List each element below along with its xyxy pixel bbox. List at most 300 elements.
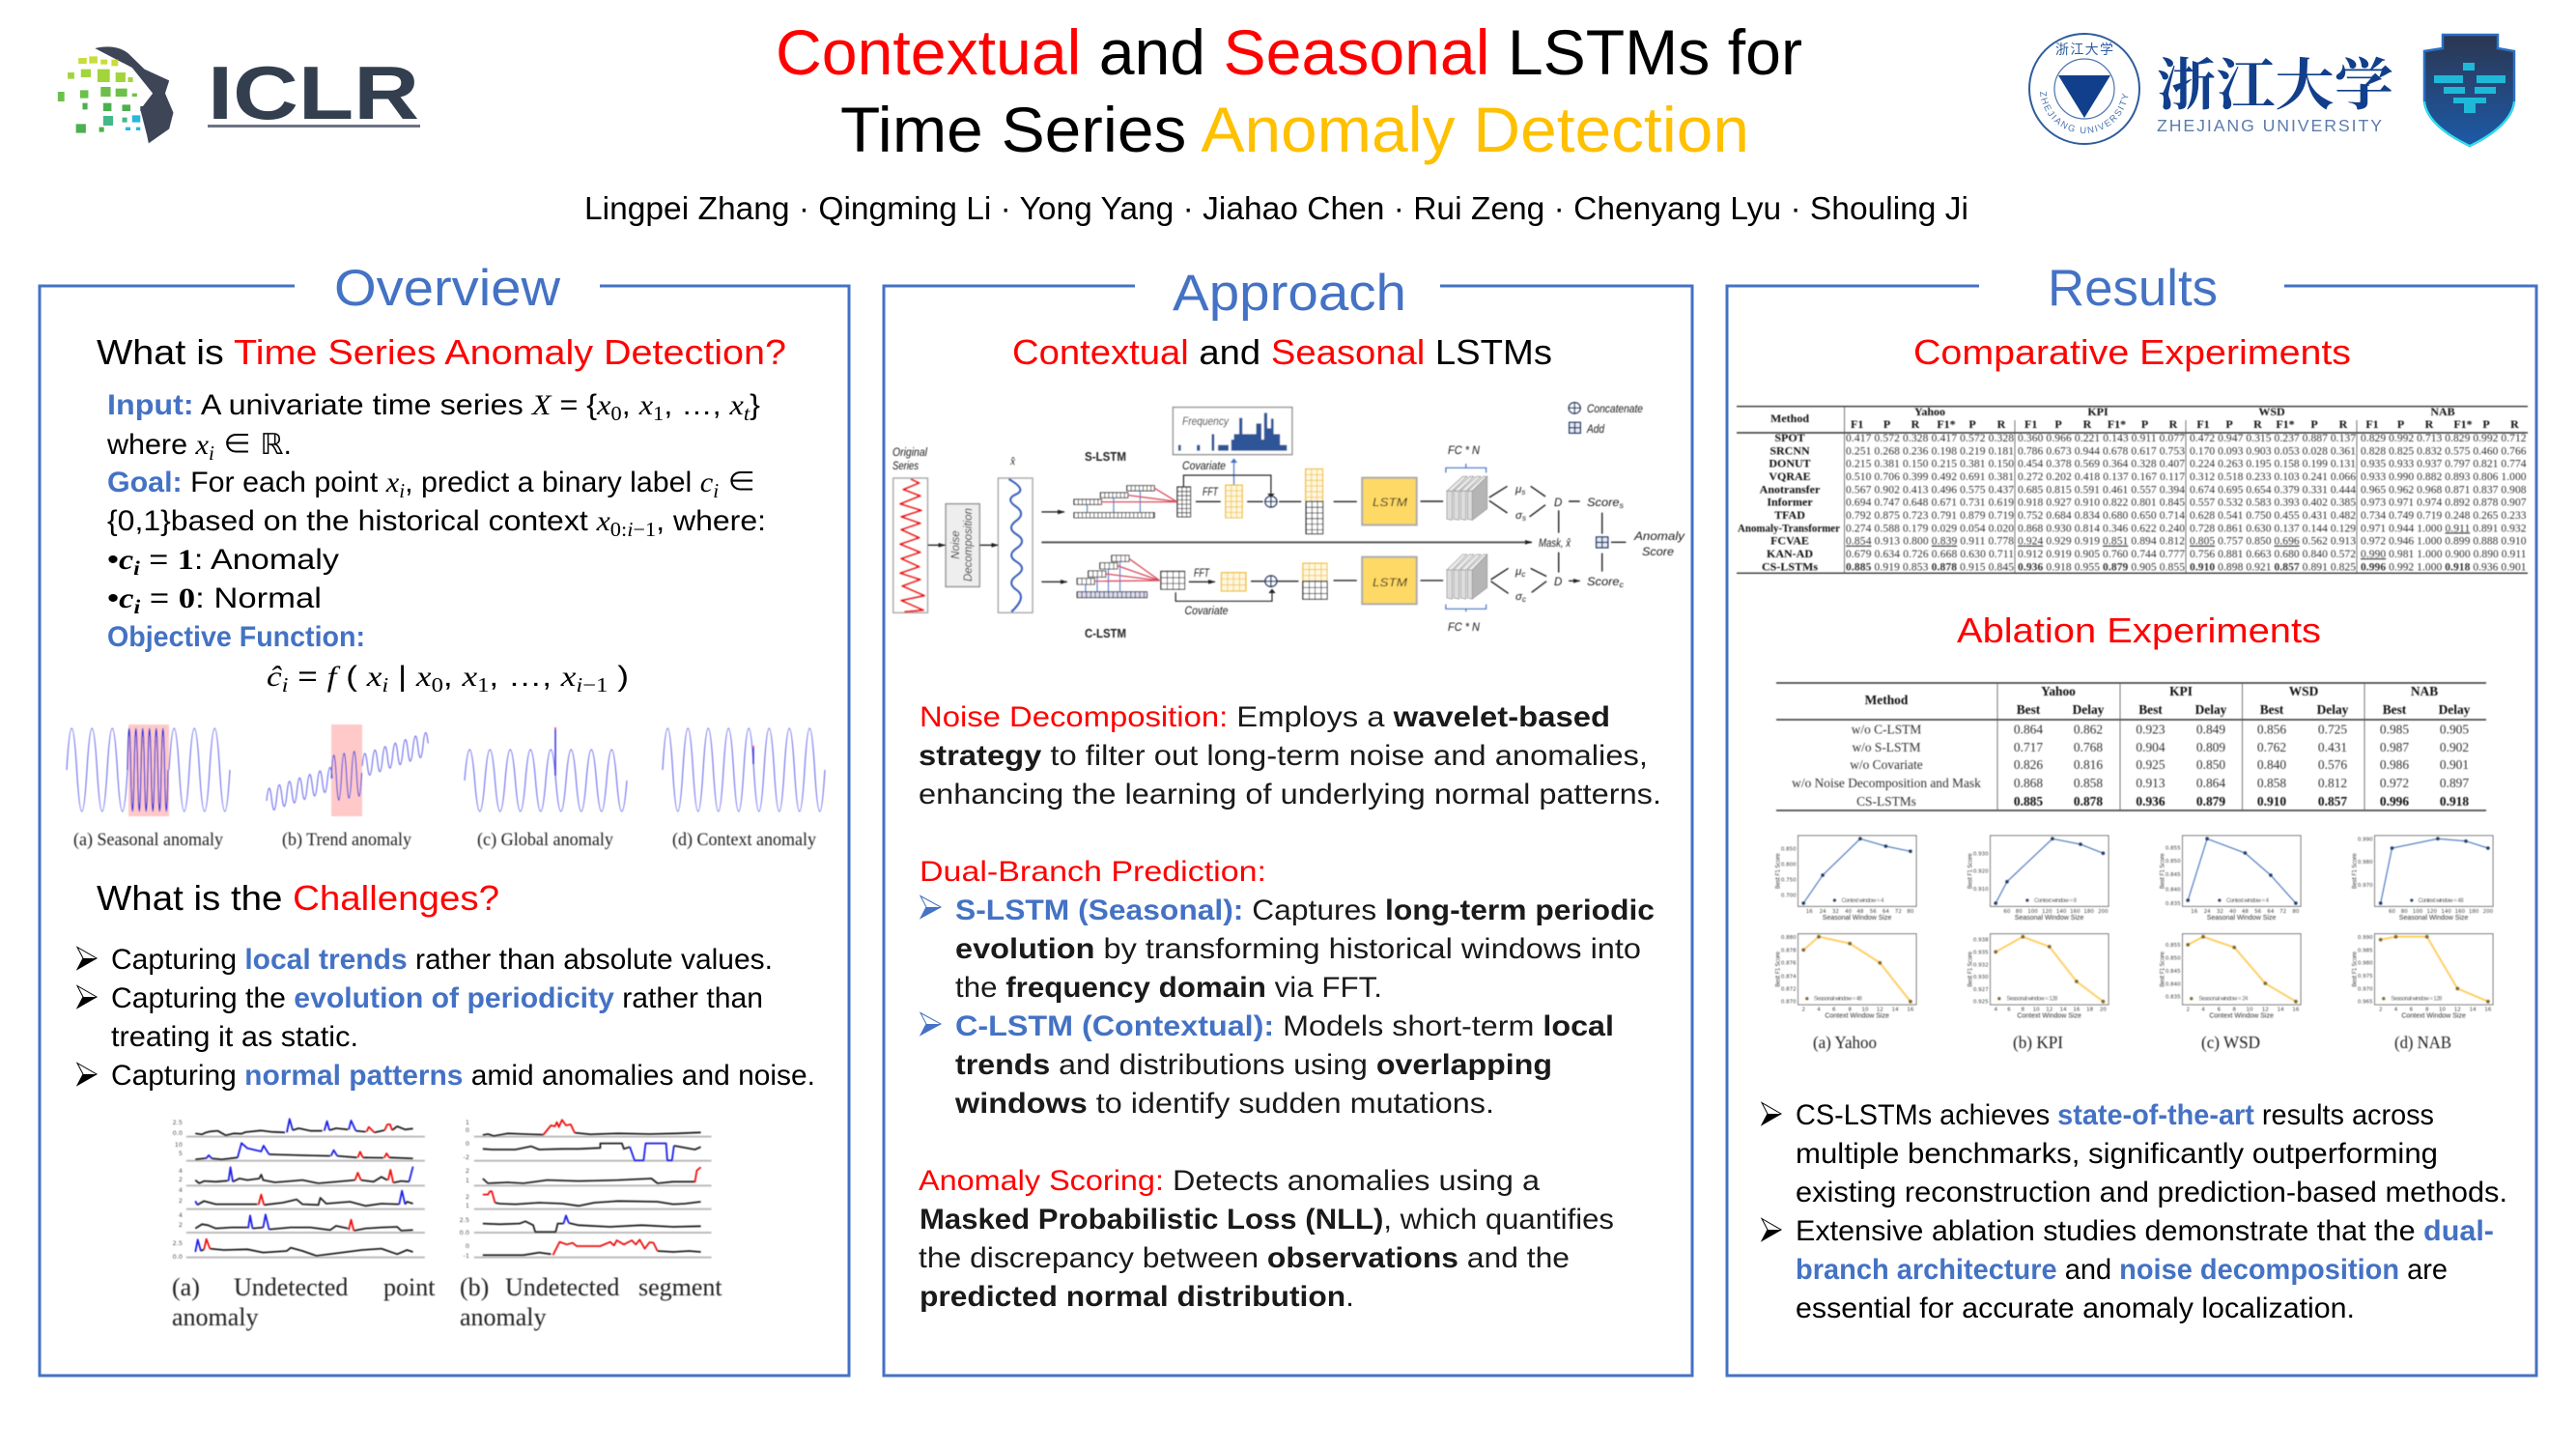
text block: problem definition: c bbox=[700, 467, 713, 498]
table: ablation results: Best bbox=[2138, 702, 2163, 717]
chart: Yahoo context window: 0.878 bbox=[1781, 948, 1797, 953]
text block: problem definition: i bbox=[209, 441, 214, 465]
chart: NAB seasonal window: 140 bbox=[2441, 909, 2451, 915]
table: comparative results: P bbox=[2054, 417, 2062, 431]
text block: problem definition: x bbox=[728, 389, 745, 421]
text block: problem definition: •c bbox=[107, 544, 131, 576]
table: comparative results: 0.472 0.947 0.315 0.237 0.887 0.137 bbox=[2190, 433, 2356, 444]
chart: WSD context window: 0.835 bbox=[2166, 995, 2181, 1001]
table: ablation results: Method bbox=[1865, 693, 1909, 707]
chart: NAB seasonal window: Context window = 48 bbox=[2419, 898, 2464, 904]
table: comparative results: DONUT bbox=[1769, 457, 1811, 470]
text block: problem definition: ∈ ℝ. bbox=[214, 429, 292, 461]
chart: Yahoo context window: 12 bbox=[1877, 1008, 1883, 1013]
architecture labels: Add bbox=[1586, 424, 1605, 436]
chart: undetected segment anomaly bbox=[460, 1119, 722, 1331]
chart: Yahoo context window: Seasonal window = 48 bbox=[1814, 997, 1863, 1003]
chart: WSD seasonal window: 48 bbox=[2242, 909, 2249, 915]
chart: WSD seasonal window: 40 bbox=[2229, 909, 2237, 915]
chart: WSD seasonal window: Context window = 4 bbox=[2226, 898, 2270, 904]
chart: KPI seasonal window: 160 bbox=[2070, 909, 2081, 915]
table: comparative results: P bbox=[2482, 417, 2490, 431]
chart: WSD seasonal window: 32 bbox=[2217, 909, 2223, 915]
table: ablation results: 0.431 bbox=[2318, 740, 2347, 754]
table: comparative results: 0.792 0.875 0.723 0.791 0.879 0.719 bbox=[1846, 510, 2014, 522]
text block: problem definition: 0 bbox=[432, 673, 443, 696]
chart: KPI context window: 6 bbox=[2007, 1008, 2011, 1013]
captions: datasets: (b) KPI bbox=[2013, 1033, 2063, 1053]
table: comparative results: F1 bbox=[2196, 417, 2210, 431]
chart: anomaly types bbox=[67, 724, 825, 850]
chart: NAB seasonal window: Seasonal Window Size bbox=[2399, 915, 2469, 922]
table: comparative results: F1 bbox=[1851, 417, 1863, 431]
chart: Yahoo context window: 8 bbox=[1848, 1008, 1852, 1013]
text block: dual-branch prediction bbox=[920, 856, 1655, 1120]
chart: KPI seasonal window: Seasonal Window Size bbox=[2015, 915, 2084, 922]
architecture labels: S-LSTM bbox=[1085, 450, 1126, 464]
table: comparative results: R bbox=[2253, 417, 2262, 431]
architecture labels: s bbox=[1521, 488, 1525, 497]
architecture labels: D bbox=[1554, 577, 1562, 588]
table: ablation results: Delay bbox=[2195, 702, 2227, 717]
table: comparative results: 0.756 0.881 0.663 0.680 0.840 0.572 bbox=[2190, 549, 2356, 560]
chart: undetected point anomaly: anomaly bbox=[172, 1303, 259, 1331]
chart: KPI context window: 14 bbox=[2060, 1008, 2067, 1013]
chart: undetected point anomaly: 5 bbox=[179, 1150, 183, 1157]
table: ablation results: 0.996 bbox=[2380, 794, 2409, 809]
table: comparative results: 0.752 0.684 0.834 0.680 0.650 0.714 bbox=[2018, 510, 2185, 522]
chart: Yahoo context window: 0.876 bbox=[1781, 961, 1797, 967]
chart: Yahoo context window: 0.880 bbox=[1781, 935, 1797, 941]
architecture labels: μ bbox=[1515, 566, 1521, 578]
table: comparative results: 0.224 0.263 0.195 0.158 0.199 0.131 bbox=[2190, 459, 2356, 470]
architecture labels: Decomposition bbox=[963, 508, 975, 582]
table: comparative results: 0.936 0.918 0.955 0.879 0.905 0.855 bbox=[2018, 561, 2185, 573]
chart: undetected point anomaly: 2 bbox=[179, 1221, 183, 1229]
chart: NAB seasonal window: 0.990 bbox=[2358, 837, 2373, 842]
table: comparative results: 0.805 0.757 0.850 0.696 0.562 0.913 bbox=[2190, 536, 2356, 548]
table: ablation results: CS-LSTMs bbox=[1856, 794, 1916, 809]
logo: Zhejiang University bbox=[2028, 33, 2515, 147]
chart: Yahoo seasonal window: 80 bbox=[1907, 909, 1914, 915]
chart: WSD context window: 16 bbox=[2292, 1008, 2300, 1013]
text block: problem definition: 0 bbox=[610, 402, 622, 425]
chart: WSD seasonal window: 0.840 bbox=[2166, 888, 2181, 894]
chart: WSD context window: 0.840 bbox=[2166, 981, 2181, 987]
text block: problem definition: {0,1}based on the historical context x bbox=[107, 505, 609, 537]
architecture labels: Anomaly bbox=[1633, 531, 1685, 543]
architecture labels: s bbox=[1522, 514, 1526, 523]
chart: Yahoo seasonal window: 64 bbox=[1882, 909, 1889, 915]
text block: problem definition: Input: A univariate time series X = {x bbox=[107, 389, 609, 421]
table: comparative results: 0.685 0.815 0.591 0.461 0.557 0.394 bbox=[2018, 484, 2185, 496]
table: comparative results: FCVAE bbox=[1770, 534, 1809, 548]
table: comparative results: F1* bbox=[1937, 417, 1956, 431]
chart: Yahoo seasonal window: 16 bbox=[1806, 909, 1813, 915]
chart: trend anomaly: (b) Trend anomaly bbox=[282, 831, 412, 850]
chart: Yahoo seasonal window: Seasonal Window Size bbox=[1823, 915, 1892, 922]
chart: undetected point anomaly bbox=[172, 1119, 436, 1331]
architecture labels: Concatenate bbox=[1587, 404, 1643, 415]
chart: NAB context window: 4 bbox=[2394, 1008, 2398, 1013]
chart: KPI seasonal window: 0.930 bbox=[1973, 851, 1989, 857]
table: comparative results: 0.933 0.990 0.882 0.893 0.806 1.000 bbox=[2361, 471, 2527, 483]
architecture labels: FC * N bbox=[1448, 622, 1481, 634]
chart: KPI seasonal window: 200 bbox=[2098, 909, 2109, 915]
table: comparative results: SPOT bbox=[1774, 431, 1805, 444]
chart: NAB context window: 0.975 bbox=[2358, 974, 2373, 980]
chart: KPI seasonal window: Context window = 8 bbox=[2034, 898, 2078, 904]
text block: problem definition: f ( x bbox=[327, 661, 380, 693]
architecture labels bbox=[892, 404, 1685, 640]
chart: KPI context window: 12 bbox=[2046, 1008, 2052, 1013]
chart: KPI seasonal window: Best F1 Score bbox=[1967, 853, 1974, 889]
chart: KPI context window: 0.930 bbox=[1973, 975, 1989, 980]
chart: KPI seasonal window: 140 bbox=[2056, 909, 2067, 915]
chart: Yahoo seasonal window: 40 bbox=[1845, 909, 1853, 915]
chart: undetected segment anomaly: 2 bbox=[466, 1193, 469, 1201]
table: comparative results: 0.786 0.673 0.944 0.678 0.617 0.753 bbox=[2018, 445, 2185, 457]
chart: WSD context window: 0.850 bbox=[2166, 956, 2181, 962]
text block: problem definition: x bbox=[415, 661, 432, 693]
table: ablation results: 0.913 bbox=[2136, 776, 2166, 790]
chart: undetected point anomaly: 2 bbox=[179, 1197, 183, 1205]
architecture labels: s bbox=[1620, 501, 1624, 510]
architecture labels: LSTM bbox=[1373, 497, 1407, 509]
chart: undetected point anomaly: 4 bbox=[179, 1167, 183, 1175]
table: ablation results: 0.910 bbox=[2257, 794, 2286, 809]
table: ablation results: w/o Covariate bbox=[1850, 757, 1923, 772]
architecture labels: FFT bbox=[1203, 487, 1219, 498]
text block: results summary: multiple benchmarks, significantly outperforming bbox=[1796, 1138, 2438, 1170]
icon: university seal: 浙江大学 bbox=[2055, 42, 2113, 57]
chart: undetected anomalies bbox=[172, 1119, 722, 1331]
table: ablation results: 0.901 bbox=[2440, 757, 2469, 772]
table: comparative results: 0.679 0.634 0.726 0.668 0.630 0.711 bbox=[1846, 549, 2014, 560]
text block: noise decomposition: enhancing the learning of underlying normal patterns. bbox=[919, 779, 1661, 810]
text block: problem definition: i−1 bbox=[627, 518, 655, 541]
table: comparative results: 0.272 0.202 0.418 0.137 0.167 0.117 bbox=[2018, 471, 2185, 483]
table: comparative results: 0.628 0.541 0.750 0.455 0.431 0.482 bbox=[2190, 510, 2356, 522]
chart: parameter sensitivity bbox=[1775, 836, 2494, 1053]
table: comparative results: KAN-AD bbox=[1767, 547, 1813, 560]
chart: Yahoo context window: 0.872 bbox=[1781, 987, 1797, 993]
text block: problem definition: i bbox=[399, 479, 405, 502]
text block: problem definition: •c bbox=[107, 582, 131, 614]
table: ablation results: 0.816 bbox=[2074, 757, 2103, 772]
table: ablation results: w/o C-LSTM bbox=[1852, 723, 1921, 736]
chart: WSD seasonal window: 0.845 bbox=[2166, 872, 2181, 878]
text block: problem definition: i bbox=[134, 595, 140, 618]
text block: problem definition: t bbox=[744, 402, 750, 425]
table: ablation results: WSD bbox=[2289, 684, 2319, 698]
table: ablation results: 0.812 bbox=[2318, 776, 2347, 790]
text block: problem definition: , predict a binary label bbox=[405, 467, 700, 498]
table: ablation results bbox=[1776, 683, 2486, 810]
table: comparative results: TFAD bbox=[1774, 508, 1805, 522]
table: comparative results: P bbox=[1883, 417, 1890, 431]
chart: Yahoo seasonal window: 0.700 bbox=[1781, 894, 1797, 899]
chart: WSD seasonal window: 0.835 bbox=[2166, 901, 2181, 907]
chart: NAB seasonal window: 0.970 bbox=[2358, 883, 2373, 889]
heading: what is time series anomaly detection: What is Time Series Anomaly Detection? bbox=[97, 332, 786, 372]
chart: context anomaly: (d) Context anomaly bbox=[672, 831, 817, 850]
panel: results bbox=[1727, 260, 2536, 1376]
chart: NAB seasonal window: 180 bbox=[2469, 909, 2479, 915]
chart: WSD seasonal window: 0.850 bbox=[2166, 859, 2181, 865]
table: comparative results: NAB bbox=[2430, 405, 2455, 418]
chart: KPI context window: 8 bbox=[2022, 1008, 2025, 1013]
text block: challenges list: Capturing normal patterns amid anomalies and noise. bbox=[111, 1060, 815, 1092]
chart: NAB seasonal window: 60 bbox=[2389, 909, 2395, 915]
architecture labels: Original bbox=[892, 447, 927, 459]
chart: WSD context window: 8 bbox=[2232, 1008, 2236, 1013]
architecture labels: μ bbox=[1515, 484, 1521, 496]
chart: model architecture diagram bbox=[892, 403, 1685, 640]
table: ablation results: 0.879 bbox=[2196, 794, 2225, 809]
table: ablation results: 0.717 bbox=[2014, 740, 2043, 754]
chart: undetected point anomaly: 2.5 bbox=[173, 1239, 183, 1247]
table: comparative results: 0.170 0.093 0.903 0.053 0.028 0.361 bbox=[2190, 445, 2356, 457]
text block: anomaly scoring: the discrepancy between observations and the bbox=[919, 1242, 1570, 1274]
text block: problem definition: i bbox=[133, 556, 140, 580]
text block: problem definition: ) bbox=[608, 661, 629, 693]
table: comparative results: 0.829 0.992 0.713 0.829 0.992 0.712 bbox=[2361, 433, 2527, 444]
chart: undetected point anomaly: 0.0 bbox=[173, 1129, 183, 1137]
text block: challenges list bbox=[77, 944, 815, 1092]
icon: university seal: ZHEJIANG UNIVERSITY bbox=[2040, 91, 2129, 133]
chart: KPI context window: Best F1 Score bbox=[1967, 952, 1974, 987]
text block: problem definition: x bbox=[461, 661, 478, 693]
table: ablation results: KPI bbox=[2169, 684, 2193, 698]
heading: Results: Results bbox=[2048, 260, 2218, 317]
chart: WSD seasonal window: Best F1 Score bbox=[2160, 853, 2166, 889]
table: ablation results: 0.986 bbox=[2380, 757, 2409, 772]
architecture labels: Series bbox=[892, 461, 919, 472]
text block: problem definition: Goal: For each point x bbox=[107, 467, 399, 498]
table: ablation results: 0.858 bbox=[2257, 776, 2286, 790]
table: comparative results: 0.674 0.695 0.654 0.379 0.331 0.444 bbox=[2190, 484, 2356, 496]
chart: NAB context window: 16 bbox=[2484, 1008, 2492, 1013]
chart: WSD seasonal window: 72 bbox=[2279, 909, 2286, 915]
text block: problem definition: ∈ bbox=[719, 467, 756, 498]
table: comparative results: F1* bbox=[2108, 417, 2126, 431]
chart: KPI context window: 10 bbox=[2033, 1008, 2040, 1013]
text block: problem definition: = bbox=[288, 661, 327, 693]
text block: problem definition: Objective Function: bbox=[107, 621, 365, 653]
text block: results summary: Extensive ablation studies demonstrate that the dual- bbox=[1796, 1215, 2494, 1247]
text block: problem definition: 1 bbox=[477, 673, 489, 696]
architecture labels: LSTM bbox=[1373, 578, 1407, 589]
table: comparative results: Informer bbox=[1767, 496, 1813, 509]
chart: NAB context window: 10 bbox=[2439, 1008, 2446, 1013]
chart: KPI context window: Seasonal window = 128 bbox=[2006, 997, 2058, 1003]
table: comparative results: 0.251 0.268 0.236 0.198 0.219 0.181 bbox=[1846, 445, 2014, 457]
chart: Yahoo context window: 14 bbox=[1892, 1008, 1899, 1013]
chart: Yahoo seasonal window: 48 bbox=[1856, 909, 1864, 915]
chart: NAB context window: Context Window Size bbox=[2401, 1013, 2466, 1020]
table: ablation results: 0.858 bbox=[2074, 776, 2103, 790]
text block: problem definition: , …, bbox=[489, 661, 561, 693]
table: ablation results: 0.905 bbox=[2440, 723, 2469, 736]
table: ablation results: 0.840 bbox=[2257, 757, 2286, 772]
chart: KPI context window bbox=[1967, 934, 2109, 1020]
table: ablation results: 0.576 bbox=[2318, 757, 2347, 772]
table: ablation results: Delay bbox=[2439, 702, 2471, 717]
chart: undetected point anomaly: point bbox=[383, 1273, 436, 1301]
table: comparative results: P bbox=[2141, 417, 2148, 431]
chart: undetected point anomaly: 10 bbox=[175, 1141, 183, 1149]
chart: WSD seasonal window: 16 bbox=[2191, 909, 2198, 915]
table: ablation results: 0.878 bbox=[2074, 794, 2103, 809]
chart: Yahoo context window: 10 bbox=[1861, 1008, 1869, 1013]
table: ablation results: 0.985 bbox=[2380, 723, 2409, 736]
architecture labels: Noise bbox=[950, 530, 962, 559]
chart: NAB seasonal window bbox=[2352, 836, 2494, 922]
text block: dual-branch prediction: S-LSTM (Seasonal): Captures long-term periodic bbox=[955, 895, 1655, 926]
table: comparative results: 0.965 0.962 0.968 0.871 0.837 0.908 bbox=[2361, 484, 2527, 496]
table: comparative results: 0.910 0.898 0.921 0.857 0.891 0.825 bbox=[2190, 561, 2356, 573]
text block: dual-branch prediction: Dual-Branch Prediction: bbox=[920, 856, 1266, 888]
icon: shield bbox=[2424, 35, 2514, 146]
chart: WSD seasonal window: 24 bbox=[2204, 909, 2211, 915]
table: comparative results: 0.972 0.946 1.000 0.899 0.888 0.910 bbox=[2361, 536, 2527, 548]
chart: undetected point anomaly: 2 bbox=[179, 1176, 183, 1183]
S branch bbox=[1074, 486, 1154, 518]
table: comparative results: 0.918 0.927 0.910 0.822 0.801 0.845 bbox=[2018, 497, 2185, 509]
table: comparative results: 0.828 0.825 0.832 0.575 0.460 0.766 bbox=[2361, 445, 2527, 457]
chart: NAB context window: 12 bbox=[2454, 1008, 2461, 1013]
architecture labels: c bbox=[1620, 581, 1624, 589]
architecture labels: Score bbox=[1587, 497, 1616, 509]
text block: problem definition: x bbox=[638, 389, 654, 421]
table: ablation results: w/o Noise Decomposition and Mask bbox=[1792, 776, 1981, 790]
text block: anomaly scoring bbox=[919, 1165, 1614, 1313]
architecture labels: Frequency bbox=[1182, 416, 1230, 428]
table: comparative results: R bbox=[2425, 417, 2434, 431]
table: ablation results: 0.918 bbox=[2440, 794, 2469, 809]
chart: WSD context window: Context Window Size bbox=[2209, 1013, 2274, 1020]
table: comparative results: Anomaly-Transformer bbox=[1738, 521, 1841, 534]
chart: NAB context window: 0.965 bbox=[2358, 1000, 2373, 1006]
chart: NAB seasonal window: 80 bbox=[2401, 909, 2408, 915]
logo: ICLR bbox=[58, 46, 420, 143]
table: comparative results: KPI bbox=[2087, 405, 2109, 418]
table: ablation results: 0.864 bbox=[2014, 723, 2043, 736]
table: ablation results: NAB bbox=[2411, 684, 2438, 698]
chart: KPI seasonal window: 80 bbox=[2016, 909, 2023, 915]
text block: results summary: CS-LSTMs achieves state-of-the-art results across bbox=[1796, 1099, 2434, 1131]
chart: undetected segment anomaly: 1 bbox=[466, 1202, 469, 1209]
chart: WSD context window: 0.845 bbox=[2166, 969, 2181, 975]
text block: problem definition: 1: Anomaly bbox=[178, 544, 322, 576]
chart: NAB context window: 6 bbox=[2410, 1008, 2414, 1013]
chart: undetected point anomaly: (a) bbox=[172, 1273, 200, 1301]
chart: KPI seasonal window: 180 bbox=[2083, 909, 2094, 915]
text block: dual-branch prediction: evolution by transforming historical windows into bbox=[955, 933, 1641, 965]
chart: KPI context window: 0.925 bbox=[1973, 1000, 1989, 1006]
text block: dual-branch prediction: trends and distributions using overlapping bbox=[955, 1049, 1552, 1081]
architecture labels: FFT bbox=[1194, 568, 1210, 580]
chart: NAB context window: Best F1 Score bbox=[2352, 952, 2359, 987]
table: comparative results: 0.996 0.992 1.000 0.918 0.936 0.901 bbox=[2361, 561, 2527, 573]
chart: NAB seasonal window: 200 bbox=[2483, 909, 2494, 915]
text block: anomaly scoring: predicted normal distribution . bbox=[920, 1281, 1354, 1313]
chart: undetected segment anomaly: -1 bbox=[464, 1252, 469, 1260]
chart: Yahoo seasonal window: 0.750 bbox=[1781, 878, 1797, 884]
table: ablation results: 0.936 bbox=[2136, 794, 2166, 809]
title: Time Series Anomaly Detection bbox=[840, 95, 1749, 165]
text block: problem definition: i bbox=[382, 673, 388, 696]
table: ablation results: Delay bbox=[2073, 702, 2105, 717]
text block: problem definition: , bbox=[443, 661, 462, 693]
chart: Yahoo context window: 4 bbox=[1817, 1008, 1821, 1013]
chart: WSD seasonal window: Seasonal Window Size bbox=[2207, 915, 2277, 922]
text block: dual-branch prediction: C-LSTM (Contextual): Models short-term local bbox=[955, 1010, 1614, 1042]
chart: undetected segment anomaly: -2 bbox=[464, 1153, 469, 1161]
architecture labels: D bbox=[1554, 497, 1562, 509]
chart: Yahoo seasonal window: 24 bbox=[1820, 909, 1826, 915]
chart: NAB context window: 14 bbox=[2470, 1008, 2477, 1013]
text block: problem definition: 0: Normal bbox=[179, 582, 304, 614]
table: ablation results: 0.850 bbox=[2196, 757, 2225, 772]
heading: Approach: Approach bbox=[1173, 265, 1406, 322]
chart: Yahoo seasonal window: 32 bbox=[1832, 909, 1839, 915]
C branch bbox=[1077, 555, 1147, 598]
chart: KPI context window: 4 bbox=[1994, 1008, 1997, 1013]
table: ablation results: 0.923 bbox=[2136, 723, 2166, 736]
text block: problem definition: = bbox=[140, 582, 179, 614]
table: ablation results: 0.762 bbox=[2257, 740, 2286, 754]
architecture labels: Mask, x̂ bbox=[1539, 538, 1571, 550]
chart: Yahoo seasonal window: 0.800 bbox=[1781, 863, 1797, 868]
table: ablation results: Delay bbox=[2317, 702, 2349, 717]
table: comparative results: CS-LSTMs bbox=[1762, 559, 1818, 573]
table: comparative results: 0.417 0.572 0.328 0.417 0.572 0.328 bbox=[1846, 433, 2014, 444]
chart: NAB context window: Seasonal window = 128 bbox=[2391, 997, 2443, 1003]
chart: KPI seasonal window: 100 bbox=[2027, 909, 2038, 915]
chart: undetected segment anomaly: Undetected bbox=[505, 1273, 619, 1301]
table: ablation results: 0.856 bbox=[2257, 723, 2286, 736]
chart: KPI context window: 18 bbox=[2086, 1008, 2094, 1013]
architecture labels: Score bbox=[1587, 577, 1616, 588]
chart: undetected segment anomaly: segment bbox=[638, 1273, 722, 1301]
text block: noise decomposition: Noise Decomposition: Employs a wavelet-based bbox=[920, 701, 1610, 733]
text block: problem definition: i bbox=[576, 673, 582, 696]
table: comparative results: WSD bbox=[2258, 405, 2285, 418]
chart: Yahoo context window: Best F1 Score bbox=[1775, 952, 1782, 987]
architecture labels: c bbox=[1521, 570, 1525, 579]
text block: problem definition: −1 bbox=[582, 673, 608, 696]
chart: KPI context window: 0.935 bbox=[1973, 950, 1989, 955]
chart: Yahoo seasonal window: Context window = 4 bbox=[1841, 898, 1884, 904]
heading: ablation experiments: Ablation Experiments bbox=[1957, 611, 2321, 650]
chart: WSD context window: 0.855 bbox=[2166, 943, 2181, 949]
text block: dual-branch prediction: windows to identify sudden mutations. bbox=[954, 1088, 1494, 1120]
chart: Yahoo seasonal window: 72 bbox=[1895, 909, 1902, 915]
table: comparative results: 0.854 0.913 0.800 0.839 0.911 0.778 bbox=[1846, 536, 2014, 548]
authors: Lingpei Zhang · Qingming Li · Yong Yang · Jiahao Chen · Rui Zeng · Chenyang Lyu · Shouling Ji bbox=[584, 190, 1968, 226]
table: ablation results: Best bbox=[2017, 702, 2041, 717]
chart: WSD seasonal window: 0.855 bbox=[2166, 845, 2181, 851]
table: comparative results: P bbox=[1968, 417, 1976, 431]
architecture labels: Covariate bbox=[1184, 606, 1229, 617]
table: ablation results: 0.885 bbox=[2014, 794, 2043, 809]
chart: undetected point anomaly: Undetected bbox=[234, 1273, 348, 1301]
wordmark: Chinese university name: 浙江大学 bbox=[2157, 40, 2393, 121]
chart: WSD context window: 6 bbox=[2218, 1008, 2222, 1013]
table: comparative results bbox=[1737, 405, 2528, 573]
